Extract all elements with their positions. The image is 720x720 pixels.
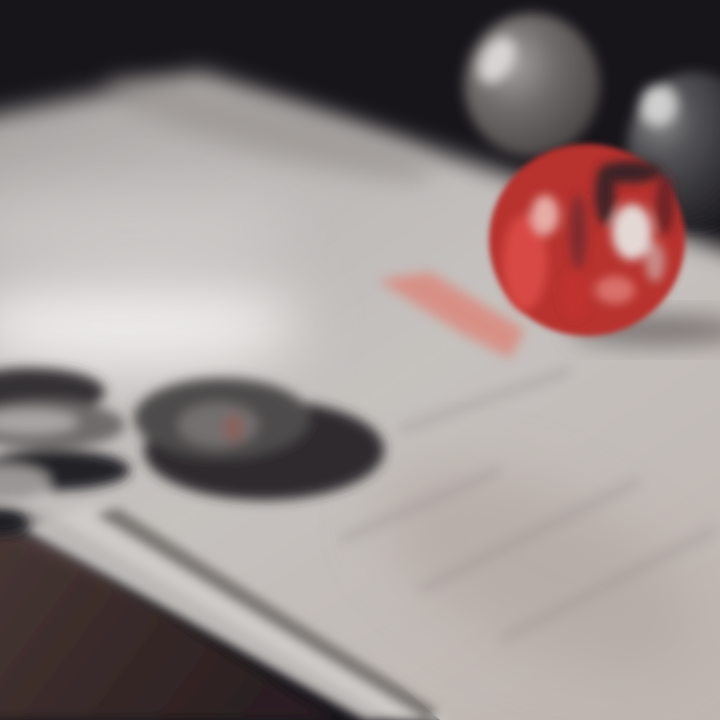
paper text lines	[340, 370, 715, 640]
icon: dark disc, left	[0, 368, 130, 534]
icon: dark sphere right	[627, 72, 720, 228]
table surface: lower left	[0, 525, 335, 720]
paper shading: right	[352, 426, 720, 714]
icon: silver sphere left	[464, 13, 600, 157]
paper highlight	[0, 275, 300, 375]
icon: dark disc, right	[134, 378, 384, 500]
red streak on paper	[378, 272, 525, 358]
paper edge: white strip and grey fold	[25, 505, 450, 720]
shadow under red sphere	[570, 315, 720, 345]
red sphere interior: patches	[503, 161, 674, 319]
icon: red sphere	[489, 144, 685, 336]
paper glow: middle left	[0, 185, 300, 275]
paper base: crisp bottom so the lower edge stays filled	[350, 600, 720, 720]
paper shading: upper	[99, 62, 441, 198]
